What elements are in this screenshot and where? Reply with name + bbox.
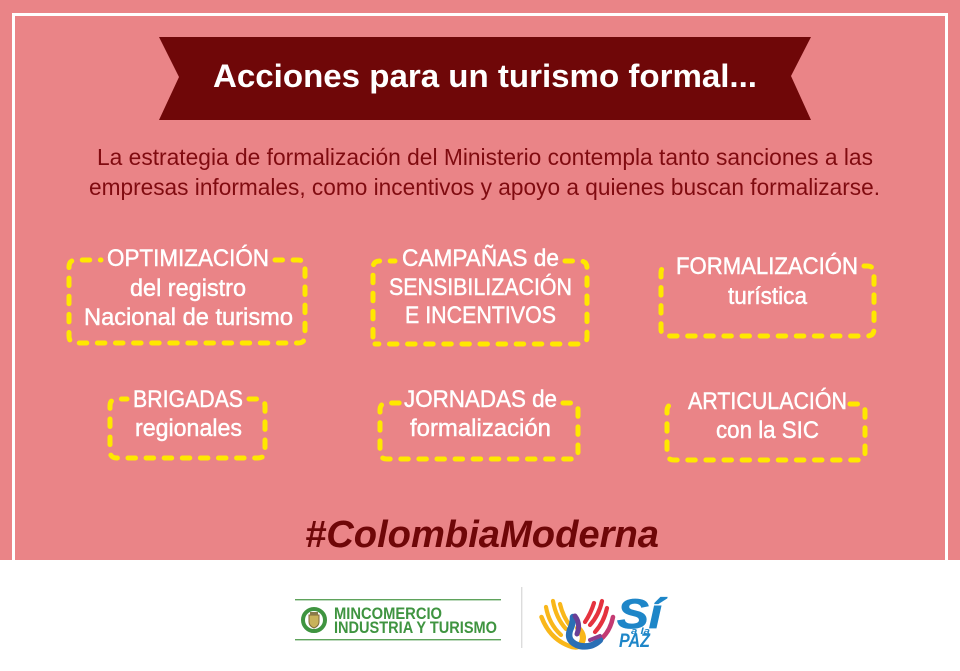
- box: articulación: ARTICULACIÓN: [688, 388, 847, 415]
- box: campañas: [373, 245, 587, 344]
- box: optimización: OPTIMIZACIÓN: [107, 245, 269, 272]
- box: campañas: CAMPAÑAS de: [402, 245, 559, 272]
- box: formalización: FORMALIZACIÓN: [676, 253, 858, 280]
- box: brigadas: regionales: [135, 415, 242, 442]
- icon: left hand: [542, 601, 583, 647]
- logo: Sí a la Paz: [542, 590, 668, 652]
- logo text: MINCOMERCIO: [334, 605, 442, 623]
- intro text: empresas informales, como incentivos y apoyo a quienes buscan formalizarse.: [89, 174, 880, 200]
- box: jornadas: [380, 386, 578, 459]
- intro text: [89, 144, 880, 200]
- hashtag: #ColombiaModerna: [305, 514, 659, 556]
- box: campañas: SENSIBILIZACIÓN: [389, 274, 572, 301]
- box: brigadas: BRIGADAS: [133, 386, 243, 413]
- box: optimización: del registro: [130, 275, 246, 302]
- logo text: PAZ: [619, 631, 651, 652]
- title: Acciones para un turismo formal...: [213, 58, 757, 94]
- white frame: [14, 14, 946, 560]
- icon: coat of arms: [303, 609, 325, 631]
- footer band: [0, 560, 960, 671]
- box: articulación: [667, 388, 865, 460]
- box: jornadas: formalización: [410, 415, 551, 442]
- box: optimización: Nacional de turismo: [84, 304, 293, 331]
- box: formalización: turística: [728, 283, 808, 310]
- divider: [521, 587, 522, 648]
- logo text: Sí: [617, 590, 668, 637]
- box: optimización: [69, 245, 305, 343]
- logo: Mincomercio: [295, 599, 501, 640]
- box: jornadas: JORNADAS de: [404, 386, 557, 413]
- title banner: [159, 37, 811, 120]
- logo text: [617, 590, 668, 652]
- logo text: INDUSTRIA Y TURISMO: [334, 619, 497, 637]
- logo text: a la: [631, 626, 650, 636]
- logo text: [334, 605, 497, 637]
- intro text: La estrategia de formalización del Ministerio contempla tanto sanciones a las: [97, 144, 873, 170]
- icon: dove: [569, 616, 600, 646]
- box: formalización: [661, 253, 874, 336]
- box: articulación: con la SIC: [716, 417, 819, 444]
- box: campañas: E INCENTIVOS: [405, 302, 556, 329]
- icon: right hand: [585, 601, 613, 640]
- box: brigadas: [110, 386, 265, 458]
